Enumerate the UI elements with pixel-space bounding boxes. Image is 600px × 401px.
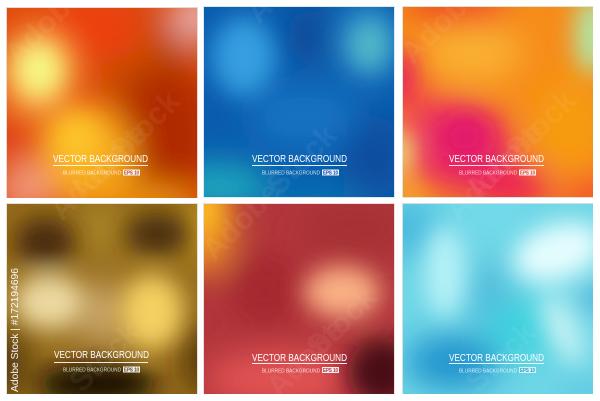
badge: EPS 10 <box>124 170 139 176</box>
heading: VECTOR BACKGROUND <box>252 153 347 165</box>
watermark <box>438 134 543 399</box>
watermark: Stock <box>299 279 384 364</box>
heading rule <box>449 363 544 364</box>
subheading: BLURRED BACKGROUND <box>459 368 517 374</box>
panel: orange pink blurred background <box>402 6 593 198</box>
heading: VECTOR BACKGROUND <box>449 352 544 364</box>
watermark: Adobe <box>194 174 287 267</box>
watermark <box>194 174 384 401</box>
badge: EPS 10 <box>520 170 535 176</box>
heading: VECTOR BACKGROUND <box>54 349 149 361</box>
heading rule <box>252 363 347 364</box>
badge: EPS 10 <box>323 368 338 374</box>
watermark: Stock <box>102 83 187 168</box>
watermark: Adobe <box>62 115 155 208</box>
watermark <box>42 134 147 399</box>
heading: VECTOR BACKGROUND <box>449 153 544 165</box>
watermark <box>0 0 187 208</box>
watermark <box>239 0 344 202</box>
panel: aqua blurred background <box>402 146 593 394</box>
watermark <box>393 0 583 207</box>
watermark: Stock <box>259 117 344 202</box>
badge: EPS 10 <box>520 368 535 374</box>
subheading: BLURRED BACKGROUND <box>262 170 320 176</box>
heading: VECTOR BACKGROUND <box>252 352 347 364</box>
panel: blue blurred background <box>203 6 395 198</box>
panel: red orange blurred background <box>6 7 198 198</box>
panel: gold blurred background <box>6 146 198 394</box>
watermark: Adobe <box>458 114 551 207</box>
heading rule <box>53 165 148 166</box>
subheading: BLURRED BACKGROUND <box>262 368 320 374</box>
badge: EPS 10 <box>124 367 139 373</box>
panel: crimson blurred background <box>203 186 395 394</box>
subheading: BLURRED BACKGROUND <box>63 368 121 374</box>
watermark: Stock <box>458 314 543 399</box>
subheading: BLURRED BACKGROUND <box>63 170 121 176</box>
watermark: Stock <box>62 314 147 399</box>
subheading: BLURRED BACKGROUND <box>459 170 517 176</box>
stock id vertical text: Adobe Stock | #172194696 <box>9 268 21 392</box>
badge: EPS 10 <box>323 170 338 176</box>
heading: VECTOR BACKGROUND <box>53 153 148 165</box>
heading rule <box>449 165 544 166</box>
watermark: Adobe <box>438 134 531 227</box>
watermark: Adobe <box>42 134 135 227</box>
heading rule <box>252 165 347 166</box>
heading rule <box>54 362 148 363</box>
watermark: Stock <box>498 82 583 167</box>
